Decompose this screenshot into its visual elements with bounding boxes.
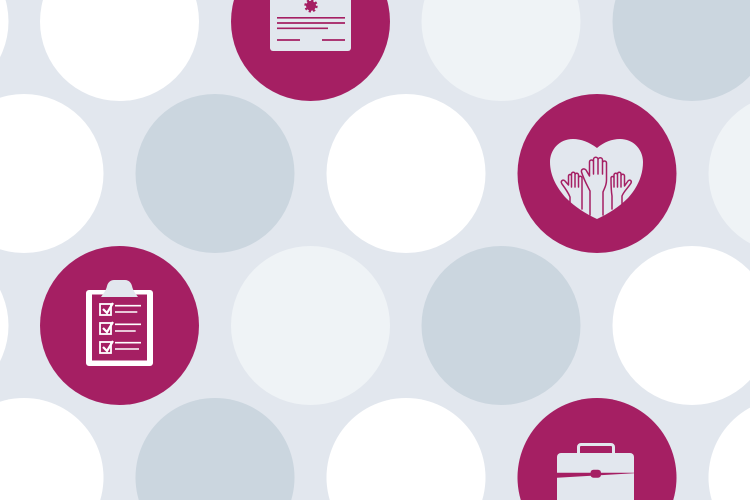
- icon: certificate: [231, 0, 390, 101]
- icon: clipboard checklist: [40, 246, 199, 405]
- center hand: [581, 157, 606, 215]
- icon: briefcase: [518, 398, 676, 500]
- icon: heart with raised hands: [518, 94, 676, 253]
- right hand: [611, 172, 631, 209]
- left hand: [561, 172, 582, 209]
